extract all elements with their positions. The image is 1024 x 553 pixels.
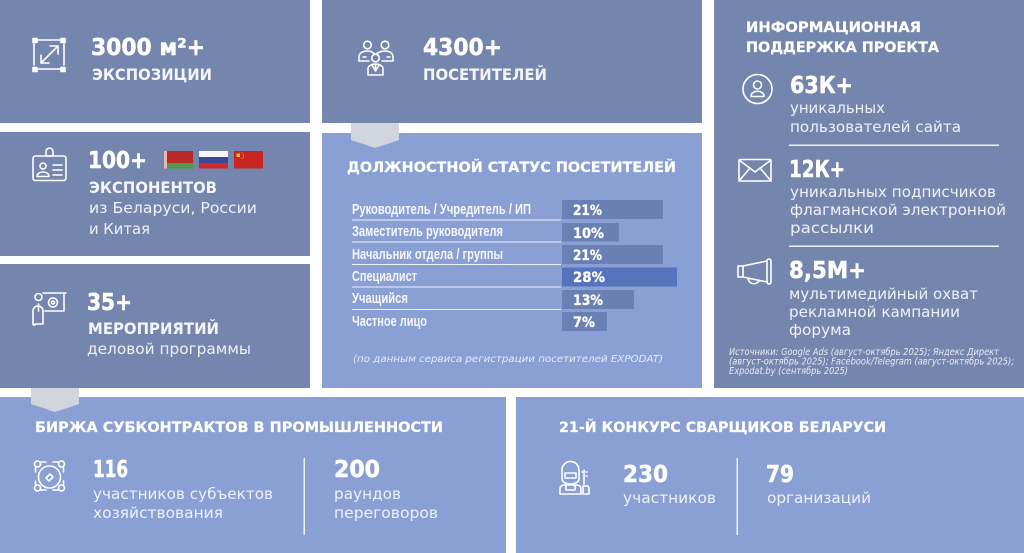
stat: media reach [789,258,978,339]
stat: newsletter subscribers: 12К+ [789,157,845,183]
bar chart: job status: 10% [573,226,604,242]
stat: newsletter subscribers: уникальных подписчиков [790,183,996,201]
bar chart: job status: Заместитель руководителя [352,224,503,240]
stat: 116 participants: участников субъектов [93,485,273,503]
stat: 3000 m2: 3000 м²+ [91,35,205,61]
stat: media reach: 8,5М+ [789,258,866,284]
stat: 79 organisations: 79 [766,462,794,488]
stat: 35+ events: МЕРОПРИЯТИЙ [88,319,219,338]
note: sources [729,347,1014,377]
stat: 230 participants [623,462,716,507]
icon: user in circle [743,74,772,104]
stat: 200 rounds [334,457,438,522]
stat: 116 participants: 116 [93,457,128,483]
icon: area resize [33,38,65,72]
stat: 230 participants: участников [623,489,716,507]
stat: 4300+ visitors [423,35,547,84]
bar chart: job status: Учащийся [352,291,408,307]
stat: 116 participants [93,457,273,522]
icon: group of people [359,41,393,75]
heading: job status: ДОЛЖНОСТНОЙ СТАТУС ПОСЕТИТЕЛЕЙ [347,159,676,176]
arrow tab: visitors to job status [351,123,399,148]
heading: information support [746,20,940,56]
stat: media reach: мультимедийный охват [789,285,978,303]
panel: exhibition area [0,0,310,123]
bar chart: job status: Руководитель / Учредитель / ИП [352,202,531,218]
stat: site users: 63К+ [790,73,853,99]
bar chart: job status: Начальник отдела / группы [352,247,503,263]
arrow tab: events to subcontracting exchange [31,388,79,412]
stat: site users: пользователей сайта [790,118,961,136]
bar chart: job status [352,200,677,331]
panel: exhibitors [0,132,310,256]
icon: badge [33,148,66,180]
stat: 230 participants: 230 [623,462,668,488]
stat: media reach: рекламной кампании [789,303,960,321]
stat: 4300+ visitors: 4300+ [423,35,502,61]
bar chart: job status: Специалист [352,269,417,285]
note: sources: Expodat.by (сентябрь 2025) [729,366,848,377]
icon: welder [560,462,589,494]
bar chart: job status: 21% [573,203,602,219]
icon: flag of Belarus [164,151,193,168]
stat: 200 rounds: раундов [334,485,401,503]
icon: network of participants [34,461,64,491]
icon: flag of Russia [199,151,228,168]
panel: subcontracting exchange [0,397,506,553]
panel: welders contest [516,397,1024,553]
stat: 79 organisations [766,462,871,507]
stat: 100+ exhibitors: из Беларуси, России [89,199,257,217]
stat: media reach: форума [789,321,851,339]
stat: 100+ exhibitors [88,148,257,238]
bar chart: job status: 13% [573,293,603,309]
stat: 35+ events [87,290,251,358]
heading: subcontracting exchange: БИРЖА СУБКОНТРАКТОВ В ПРОМЫШЛЕННОСТИ [35,420,443,436]
stat: 100+ exhibitors: 100+ [88,148,147,174]
stat: newsletter subscribers: рассылки [790,219,874,237]
stat: 200 rounds: переговоров [334,504,438,522]
stat: newsletter subscribers: флагманской электронной [790,201,1006,219]
panel: visitor job status [322,133,702,388]
stat: site users [790,73,961,136]
stat: 3000 m2 [91,35,212,84]
icon: megaphone [738,259,771,284]
panel: events [0,264,310,388]
heading: welders contest: 21-Й КОНКУРС СВАРЩИКОВ БЕЛАРУСИ [559,419,886,436]
stat: 200 rounds: 200 [334,457,380,483]
heading: information support: ИНФОРМАЦИОННАЯ [746,20,921,36]
icon: envelope [739,160,771,181]
icon: presenter with gear [33,293,66,325]
bar chart: job status: 28% [573,270,605,286]
stat: 3000 m2: ЭКСПОЗИЦИИ [92,65,212,84]
stat: 100+ exhibitors: и Китая [89,220,150,238]
bar chart: job status: 7% [573,315,595,331]
icon: flag of China [234,151,263,168]
stat: 116 participants: хозяйствования [93,504,223,522]
heading: information support: ПОДДЕРЖКА ПРОЕКТА [746,40,940,56]
panel: visitors [322,0,702,123]
bar chart: job status: 21% [573,248,602,264]
stat: 35+ events: деловой программы [87,340,251,358]
stat: site users: уникальных [790,99,885,117]
bar chart: job status: Частное лицо [352,314,427,330]
stat: 35+ events: 35+ [87,290,132,316]
panel: information support [714,0,1024,388]
note: data source: (по данным сервиса регистрации посетителей EXPODAT) [353,354,663,365]
stat: newsletter subscribers [789,157,1006,237]
stat: 4300+ visitors: ПОСЕТИТЕЛЕЙ [423,65,547,84]
stat: 79 organisations: организаций [767,489,871,507]
stat: 100+ exhibitors: ЭКСПОНЕНТОВ [89,178,217,197]
